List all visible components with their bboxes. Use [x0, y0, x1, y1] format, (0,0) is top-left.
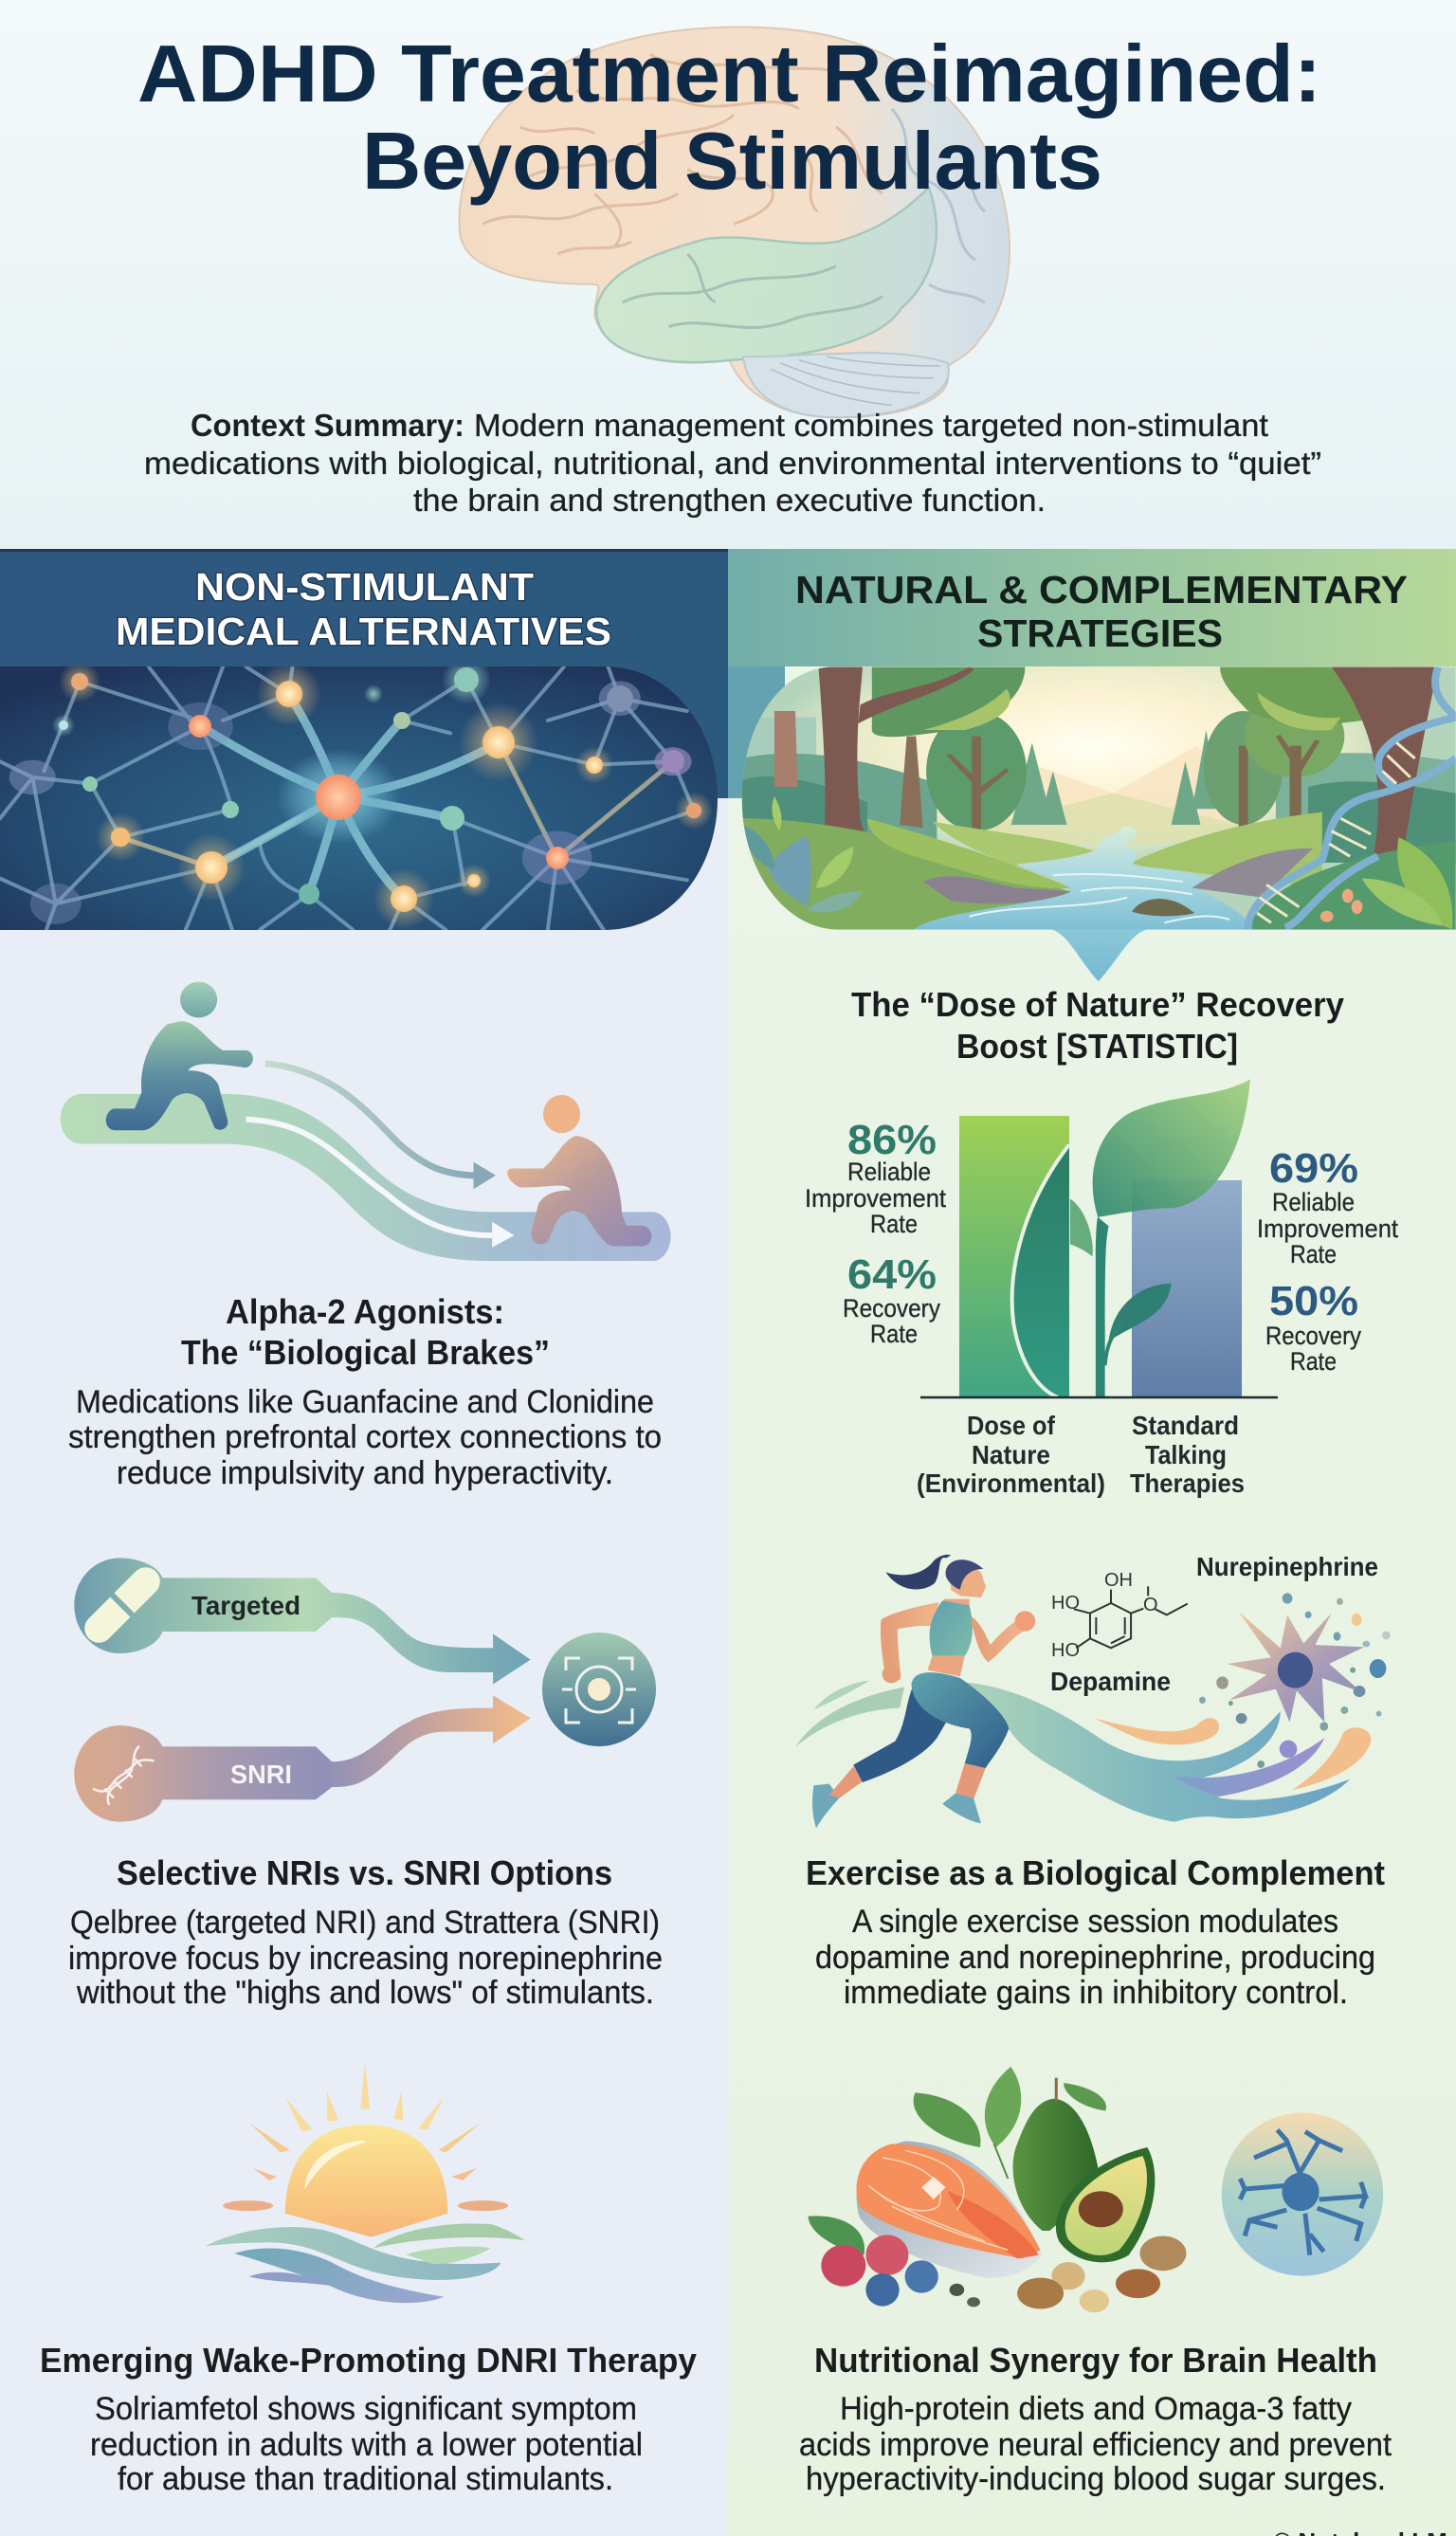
text: emerging wake-promoting therapy: [40, 2341, 697, 2497]
text: nutritional synergy: Nutritional Synergy for Brain Health: [814, 2341, 1377, 2380]
text: nutritional synergy: hyperactivity-inducing blood sugar surges.: [806, 2461, 1386, 2497]
stat: 86% reliable improvement: Reliable: [847, 1158, 931, 1186]
text: alpha-2 agonists: Alpha-2 Agonists:: [226, 1292, 504, 1331]
panel: right banner: [728, 549, 1456, 798]
panel: left banner: [0, 549, 728, 798]
motion swooshes: [795, 1681, 1371, 1822]
river pointer: [1048, 929, 1151, 981]
bar chart: recovery rates: [805, 1079, 1398, 1498]
stat: 86% reliable improvement: 86%: [847, 1117, 937, 1163]
sun rays: [223, 2062, 508, 2211]
stat: 69% reliable improvement: Improvement: [1257, 1214, 1398, 1243]
neuron glow nodes: [52, 655, 713, 929]
text: emerging wake-promoting therapy: Solriamfetol shows significant symptom: [95, 2391, 637, 2427]
title: [137, 29, 1321, 207]
nuts: [1017, 2236, 1186, 2312]
diagram: targeted and SNRI pathways: [74, 1558, 656, 1822]
text: exercise: dopamine and norepinephrine, producing: [815, 1940, 1375, 1976]
stat: 64% recovery: [843, 1251, 940, 1348]
stat: 50% recovery: Recovery: [1265, 1322, 1361, 1350]
label: HO upper: HO: [1051, 1593, 1080, 1614]
text: alpha-2 agonists: strengthen prefrontal cortex connections to: [68, 1419, 662, 1455]
stat: 69% reliable improvement: Reliable: [1272, 1188, 1355, 1216]
category: standard therapies: Standard: [1132, 1411, 1239, 1440]
axis: [920, 1396, 1278, 1398]
bar: dose of nature: [959, 1116, 1069, 1397]
icon: biological brakes figures and track: [61, 982, 671, 1261]
context summary: the brain and strengthen executive function.: [413, 483, 1046, 518]
heading: non-stimulant: MEDICAL ALTERNATIVES: [116, 610, 611, 653]
heading: dose of nature: Boost [STATISTIC]: [956, 1027, 1238, 1066]
stat: 50% recovery: [1265, 1278, 1361, 1376]
heading: non-stimulant: NON-STIMULANT: [195, 565, 534, 609]
icon: pill: [79, 1561, 166, 1649]
category: dose of nature: Dose of: [967, 1411, 1056, 1440]
icon: DNA: [93, 1746, 155, 1805]
category: dose of nature: [917, 1411, 1105, 1498]
text: emerging wake-promoting therapy: Emerging Wake-Promoting DNRI Therapy: [40, 2341, 697, 2380]
illustration: forest and DNA: [728, 666, 1456, 981]
label: targeted: Targeted: [191, 1591, 300, 1620]
category: dose of nature: Nature: [972, 1440, 1050, 1469]
person: left figure: [106, 982, 253, 1130]
category: standard therapies: Therapies: [1130, 1469, 1245, 1498]
illustration: brain foods: [809, 2067, 1383, 2312]
text: nutritional synergy: High-protein diets and Omaga-3 fatty: [840, 2391, 1352, 2427]
text: selective NRIs: without the "highs and lows" of stimulants.: [76, 1975, 654, 2011]
person: right figure: [507, 1095, 651, 1247]
stat: 86% reliable improvement: [805, 1117, 946, 1238]
label: oxygen: O: [1143, 1595, 1158, 1615]
stat: 86% reliable improvement: Improvement: [805, 1184, 946, 1213]
heading: non-stimulant: [116, 565, 611, 653]
text: selective NRIs: Qelbree (targeted NRI) and Strattera (SNRI): [70, 1905, 660, 1941]
icon: focus target: [542, 1633, 656, 1746]
arrow: upper arrow: [265, 1064, 496, 1189]
illustration: runner with neurotransmitters: [795, 1552, 1391, 1828]
text: selective NRIs: Selective NRIs vs. SNRI Options: [117, 1853, 612, 1892]
leaves: [809, 2067, 1021, 2255]
arrow: SNRI pathway: [74, 1695, 531, 1822]
text: selective NRIs: [68, 1853, 663, 2011]
title: Beyond Stimulants: [362, 117, 1102, 207]
background: left column: [0, 550, 728, 2536]
text: alpha-2 agonists: The “Biological Brakes”: [181, 1333, 550, 1372]
context summary: [144, 408, 1321, 518]
background: right column: [728, 550, 1456, 2536]
brain illustration: [460, 27, 1010, 417]
title: ADHD Treatment Reimagined:: [137, 29, 1321, 119]
text: exercise: A single exercise session modulates: [852, 1904, 1338, 1940]
avocado: [1013, 2078, 1155, 2262]
label: nurepinephrine: Nurepinephrine: [1196, 1552, 1378, 1581]
heading: natural: [795, 568, 1408, 655]
bar: standard therapies: [1132, 1180, 1242, 1397]
text: nutritional synergy: acids improve neural efficiency and prevent: [799, 2427, 1392, 2463]
berries: [821, 2235, 980, 2307]
arrow: targeted pathway: [74, 1558, 531, 1685]
label: depamine: Depamine: [1050, 1667, 1171, 1696]
category: standard therapies: Talking: [1145, 1440, 1227, 1469]
context summary: medications with biological, nutritional, and environmental interventions to “quiet”: [144, 446, 1321, 481]
stat: 69% reliable improvement: 69%: [1269, 1145, 1358, 1192]
stat: 64% recovery: Recovery: [843, 1294, 940, 1323]
category: standard therapies: [1130, 1411, 1245, 1498]
heading: dose of nature: The “Dose of Nature” Recovery: [851, 985, 1344, 1024]
plant motif: [1012, 1079, 1250, 1397]
heading: dose of nature: [851, 985, 1344, 1066]
text: exercise: [806, 1853, 1385, 2011]
brain-cell medallion: [1222, 2112, 1383, 2276]
illustration: neural network: [0, 655, 720, 932]
neuron burst: [1199, 1593, 1391, 1768]
text: emerging wake-promoting therapy: reduction in adults with a lower potential: [90, 2427, 643, 2463]
text: exercise: immediate gains in inhibitory control.: [844, 1975, 1348, 2011]
context summary: Modern management combines targeted non-stimulant: [474, 408, 1268, 443]
icon: sun over waves: [203, 2062, 525, 2303]
text: alpha-2 agonists: [68, 1292, 662, 1491]
category: dose of nature: (Environmental): [917, 1469, 1105, 1498]
background: top section: [0, 0, 1456, 550]
stat: 64% recovery: Rate: [870, 1320, 918, 1348]
stat: 50% recovery: 50%: [1269, 1278, 1358, 1324]
sloped track: [61, 1094, 671, 1261]
text: alpha-2 agonists: Medications like Guanfacine and Clonidine: [76, 1384, 654, 1420]
text: selective NRIs: improve focus by increasing norepinephrine: [68, 1941, 663, 1977]
label: OH: OH: [1104, 1570, 1133, 1591]
stat: 69% reliable improvement: Rate: [1290, 1240, 1337, 1268]
text: exercise: Exercise as a Biological Complement: [806, 1853, 1385, 1892]
heading: natural: NATURAL & COMPLEMENTARY: [795, 568, 1408, 611]
text: emerging wake-promoting therapy: for abuse than traditional stimulants.: [118, 2461, 613, 2497]
salmon: [856, 2141, 1043, 2278]
label: HO lower: HO: [1051, 1640, 1080, 1661]
heading: natural: STRATEGIES: [977, 611, 1223, 655]
stat: 50% recovery: Rate: [1290, 1347, 1337, 1376]
runner: [812, 1555, 1035, 1828]
context summary: Context Summary:: [191, 408, 464, 443]
stat: 69% reliable improvement: [1257, 1145, 1398, 1268]
arrow: white track arrow: [246, 1120, 515, 1248]
label: SNRI: SNRI: [230, 1760, 292, 1789]
text: nutritional synergy: [799, 2341, 1392, 2497]
text: alpha-2 agonists: reduce impulsivity and hyperactivity.: [117, 1455, 613, 1491]
molecule structure: [1074, 1586, 1188, 1648]
stat: 86% reliable improvement: Rate: [870, 1210, 918, 1238]
stat: 64% recovery: 64%: [847, 1251, 937, 1298]
